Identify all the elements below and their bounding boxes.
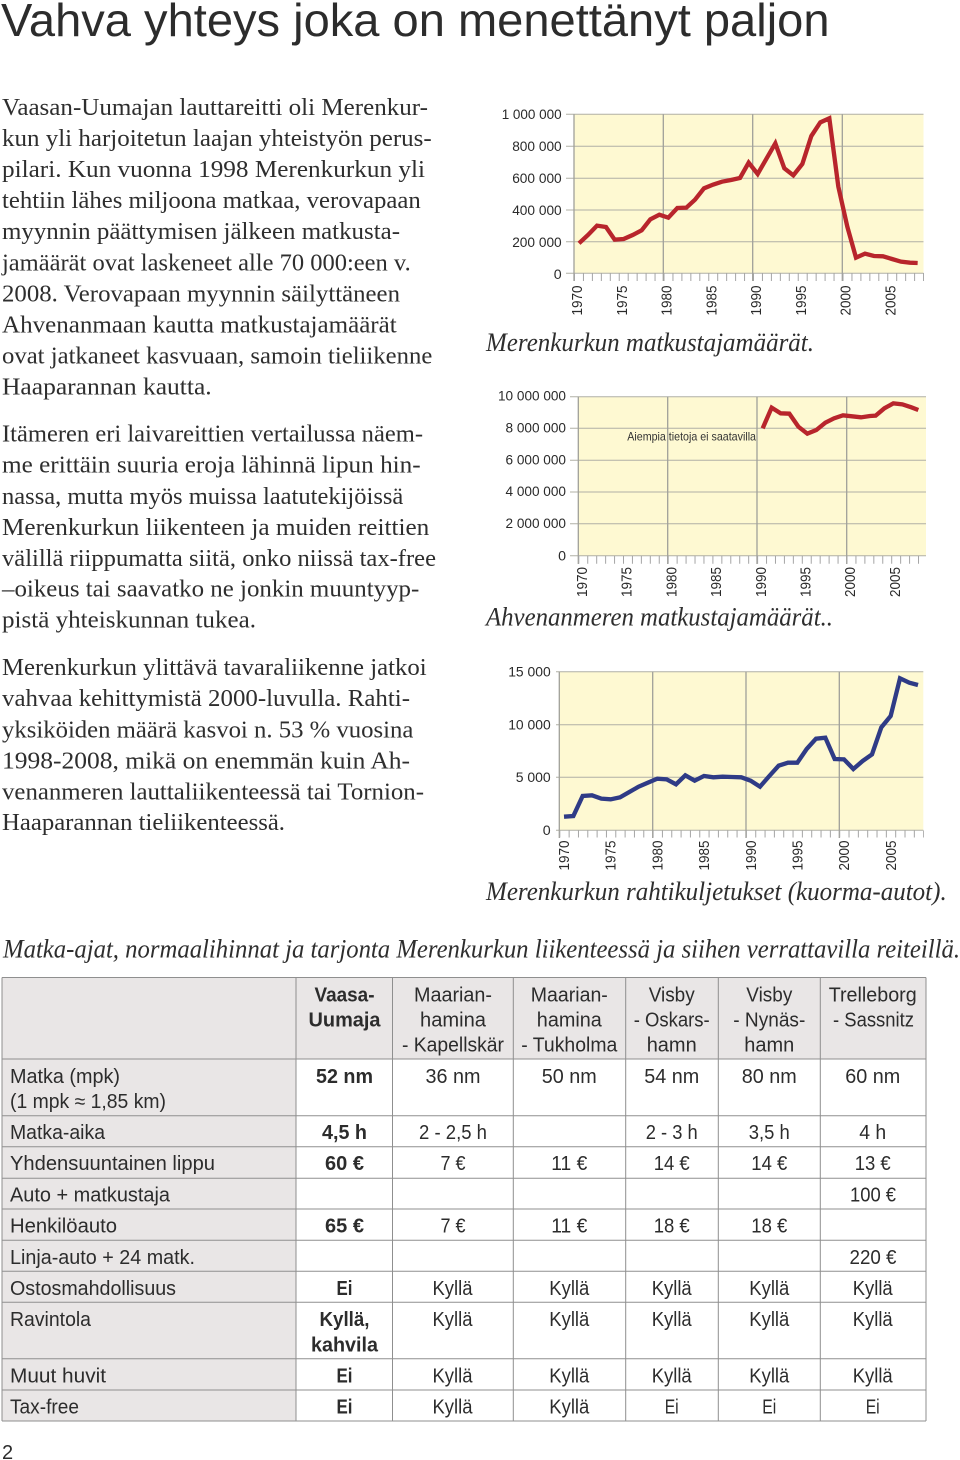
table header row: hamn — [647, 1034, 697, 1056]
row: Yhdensuuntainen lippu: 60 € — [325, 1153, 364, 1175]
row: Muut huvit: Kyllä — [652, 1365, 693, 1387]
text block: body paragraph 2: välillä riippumatta siitä, onko niissä tax-free — [2, 545, 436, 572]
data line: passengers — [579, 118, 918, 263]
row: Yhdensuuntainen lippu: 7 € — [440, 1153, 466, 1175]
row: Matka: 36 nm — [426, 1066, 480, 1088]
row: Yhdensuuntainen lippu — [10, 1153, 891, 1175]
table header row: hamina — [420, 1010, 487, 1032]
row: Matka: 80 nm — [742, 1066, 797, 1088]
row: Linja-auto: Linja-auto + 24 matk. — [10, 1247, 195, 1269]
y axis labels: 6 000 000 — [506, 452, 566, 468]
row: Auto + matkustaja — [10, 1184, 896, 1206]
text block: body paragraph 2: pistä yhteiskunnan tukea. — [2, 607, 256, 634]
row: Matka: (1 mpk ≈ 1,85 km) — [10, 1091, 166, 1113]
row: Yhdensuuntainen lippu: 14 € — [751, 1153, 787, 1175]
y axis labels: 1 000 000 — [502, 107, 562, 123]
y axis labels: 800 000 — [512, 139, 562, 155]
table header row: Visby — [649, 984, 695, 1006]
row: Matka-aika: 2 - 3 h — [646, 1122, 698, 1144]
row: Tax-free: Kyllä — [432, 1396, 473, 1418]
x axis labels: 1975 — [620, 567, 636, 597]
row: Matka: 54 nm — [644, 1066, 699, 1088]
x axis labels: 1980 — [660, 286, 676, 316]
table header row: - Nynäs- — [733, 1010, 805, 1032]
row: Yhdensuuntainen lippu: Yhdensuuntainen lippu — [10, 1153, 215, 1175]
row: Ostosmahdollisuus: Kyllä — [432, 1278, 473, 1300]
y axis labels: 400 000 — [512, 203, 562, 219]
text block: body paragraph 2: Merenkurkun liikenteen ja muiden reittien — [2, 514, 429, 541]
row: Ostosmahdollisuus: Kyllä — [652, 1278, 693, 1300]
row: Henkilöauto: 65 € — [325, 1215, 364, 1237]
row: Henkilöauto: 7 € — [440, 1215, 466, 1237]
text block: body paragraph 2: me erittäin suuria eroja lähinnä lipun hin- — [2, 452, 421, 479]
table header row: - Oskars- — [634, 1010, 710, 1032]
row: Henkilöauto: Henkilöauto — [10, 1215, 117, 1237]
x axis labels: 1980 — [650, 840, 666, 870]
text block: body paragraph 1 — [1, 94, 432, 400]
x axis labels — [557, 840, 900, 870]
text block: body paragraph 2: –oikeus tai saavatko ne jonkin muuntyyp- — [1, 576, 419, 603]
y axis labels: 0 — [558, 549, 566, 565]
row: Muut huvit: Kyllä — [432, 1365, 473, 1387]
y axis labels — [498, 389, 566, 565]
row: Muut huvit: Ei — [336, 1365, 352, 1387]
x axis labels: 2000 — [837, 840, 853, 870]
x axis labels: 2005 — [884, 840, 900, 870]
x axis labels: 1970 — [570, 286, 586, 316]
x axis labels: 1970 — [557, 840, 573, 870]
y axis labels: 2 000 000 — [506, 516, 566, 532]
text block: body paragraph 1: 2008. Verovapaan myynnin säilyttäneen — [2, 280, 400, 308]
comparison table — [2, 978, 926, 1421]
text block: body paragraph 3: Haaparannan tieliikenteessä. — [2, 809, 285, 836]
y axis labels: 0 — [543, 823, 551, 839]
table grid and shading — [2, 978, 926, 1421]
row: Matka: 52 nm — [316, 1066, 373, 1088]
row: Matka: Matka (mpk) — [10, 1066, 120, 1088]
x axis labels: 1975 — [615, 286, 631, 316]
x axis labels: 1985 — [697, 840, 713, 870]
table header row: Vaasa- — [314, 984, 374, 1006]
y axis labels: 0 — [554, 267, 562, 283]
table header row: Maarian- — [414, 984, 492, 1006]
text block: body paragraph 3: Merenkurkun ylittävä tavaraliikenne jatkoi — [2, 654, 427, 681]
row: Muut huvit: Kyllä — [853, 1365, 894, 1387]
text block: body paragraph 1: Vaasan-Uumajan lauttareitti oli Merenkur- — [2, 94, 428, 121]
row: Matka-aika — [10, 1122, 886, 1144]
x axis labels: 1990 — [744, 840, 760, 870]
row: Matka-aika: 3,5 h — [749, 1122, 790, 1144]
data line: freight — [564, 678, 918, 817]
text block: body paragraph 1: myynnin päättymisen jälkeen matkusta- — [2, 218, 400, 245]
x axis labels: 1990 — [754, 567, 770, 597]
y axis labels — [508, 665, 551, 839]
text block: body paragraph 1: ovat jatkaneet kasvuaan, samoin tieliikenne — [2, 342, 432, 369]
row: Ostosmahdollisuus: Kyllä — [749, 1278, 790, 1300]
row: Tax-free: Ei — [665, 1396, 679, 1418]
row: Ostosmahdollisuus: Kyllä — [549, 1278, 590, 1300]
text block: body paragraph 3: yksiköiden määrä kasvoi n. 53 % vuosina — [2, 716, 413, 743]
row: Yhdensuuntainen lippu: 14 € — [654, 1153, 690, 1175]
x axis labels: 1980 — [664, 567, 680, 597]
y axis labels — [502, 107, 562, 283]
row: Ravintola: Kyllä — [652, 1309, 693, 1331]
row: Tax-free: Ei — [866, 1396, 880, 1418]
row: Tax-free: Ei — [336, 1396, 352, 1418]
row: Henkilöauto: 11 € — [551, 1215, 587, 1237]
x axis labels: 2005 — [883, 286, 899, 316]
x axis labels: 1995 — [798, 567, 814, 597]
caption: chart 3: Merenkurkun rahtikuljetukset (kuorma-autot). — [485, 877, 947, 906]
row: Matka: 60 nm — [845, 1066, 900, 1088]
caption: chart 1: Merenkurkun matkustajamäärät. — [485, 328, 814, 357]
x axis labels: 2005 — [888, 567, 904, 597]
row: Auto + matkustaja: Auto + matkustaja — [10, 1184, 171, 1206]
x axis labels: 1990 — [749, 286, 765, 316]
text block: body paragraph 1: Haaparannan kautta. — [2, 373, 212, 400]
row: Ostosmahdollisuus — [10, 1278, 894, 1300]
table header row: - Tukholma — [521, 1034, 618, 1056]
text block: body paragraph 2: nassa, mutta myös muissa laatutekijöissä — [2, 483, 403, 510]
x axis labels: 1970 — [575, 567, 591, 597]
line chart: Merenkurkun rahtikuljetukset — [508, 665, 924, 870]
x axis labels — [575, 567, 904, 597]
x axis labels: 2000 — [843, 567, 859, 597]
text block: body paragraph 2 — [1, 421, 436, 634]
row: Linja-auto: 220 € — [850, 1247, 896, 1269]
row: Yhdensuuntainen lippu: 13 € — [855, 1153, 891, 1175]
row: Henkilöauto: 18 € — [654, 1215, 690, 1237]
row: Matka-aika: 4,5 h — [322, 1122, 367, 1144]
text block: body paragraph 1: tehtiin lähes miljoona matkaa, verovapaan — [2, 187, 421, 214]
text block: body paragraph 2: Itämeren eri laivareittien vertailussa näem- — [2, 421, 423, 448]
y axis labels: 4 000 000 — [506, 484, 566, 500]
row: Ostosmahdollisuus: Ostosmahdollisuus — [10, 1278, 176, 1300]
row: Matka-aika: 4 h — [859, 1122, 886, 1144]
table header row: Visby — [746, 984, 792, 1006]
row: Ravintola: Kyllä — [749, 1309, 790, 1331]
row: Matka: 50 nm — [542, 1066, 597, 1088]
row: Henkilöauto: 18 € — [751, 1215, 787, 1237]
row: Tax-free: Tax-free — [10, 1396, 79, 1418]
row: Ostosmahdollisuus: Ei — [336, 1278, 352, 1300]
table header row: Maarian- — [531, 984, 608, 1006]
row: Yhdensuuntainen lippu: 11 € — [551, 1153, 587, 1175]
table header row: hamn — [744, 1034, 794, 1056]
caption: chart 2: Ahvenanmeren matkustajamäärät.. — [484, 603, 833, 632]
table header row — [308, 984, 917, 1056]
y axis labels: 8 000 000 — [506, 420, 566, 436]
table header row: hamina — [537, 1010, 603, 1032]
table header row: Trelleborg — [829, 984, 917, 1006]
row: Matka — [10, 1066, 900, 1113]
row: Linja-auto — [10, 1247, 896, 1269]
text block: body paragraph 3 — [2, 654, 427, 836]
text block: body paragraph 3: venanmeren lauttaliikenteessä tai Tornion- — [2, 778, 424, 805]
row: Ravintola: Kyllä — [549, 1309, 590, 1331]
row: Muut huvit: Muut huvit — [10, 1365, 106, 1387]
note: data not available: Aiempia tietoja ei saatavilla — [627, 430, 756, 444]
line chart: Merenkurkun matkustajamäärät — [502, 107, 924, 316]
row: Matka-aika: 2 - 2,5 h — [419, 1122, 487, 1144]
x axis labels: 1985 — [709, 567, 725, 597]
row: Muut huvit: Kyllä — [549, 1365, 590, 1387]
table header row: Uumaja — [308, 1010, 381, 1032]
row: Muut huvit: Kyllä — [749, 1365, 790, 1387]
text block: body paragraph 1: kun yli harjoitetun laajan yhteistyön perus- — [2, 125, 432, 152]
x axis labels: 1975 — [604, 840, 620, 870]
y axis labels: 600 000 — [512, 171, 562, 187]
row: Ravintola: Kyllä, — [320, 1309, 370, 1331]
line chart: Ahvenanmeren matkustajamäärät — [498, 389, 926, 597]
row: Matka-aika: Matka-aika — [10, 1122, 106, 1144]
y axis labels: 10 000 — [508, 718, 551, 734]
row: Ravintola: Ravintola — [10, 1309, 92, 1331]
x axis labels: 1995 — [790, 840, 806, 870]
text block: body paragraph 1: pilari. Kun vuonna 1998 Merenkurkun yli — [2, 156, 425, 183]
row: Henkilöauto — [10, 1215, 787, 1237]
text block: body paragraph 1: Ahvenanmaan kautta matkustajamäärät — [2, 311, 397, 338]
row: Ravintola — [10, 1309, 894, 1356]
data line: Åland passengers — [763, 403, 918, 434]
y axis labels: 5 000 — [516, 770, 551, 786]
text block: body paragraph 1: jamäärät ovat laskeneet alle 70 000:een v. — [1, 250, 411, 276]
row: Ravintola: Kyllä — [853, 1309, 894, 1331]
row: Ravintola: Kyllä — [432, 1309, 473, 1331]
row: Ravintola: kahvila — [311, 1334, 379, 1356]
y axis labels: 10 000 000 — [498, 389, 566, 405]
text block: body paragraph 3: 1998-2008, mikä on enemmän kuin Ah- — [2, 747, 410, 774]
y axis labels: 200 000 — [512, 235, 562, 251]
row: Tax-free: Kyllä — [549, 1396, 590, 1418]
y axis labels: 15 000 — [508, 665, 551, 681]
x axis labels: 2000 — [839, 286, 855, 316]
x axis labels: 1995 — [794, 286, 810, 316]
row: Ostosmahdollisuus: Kyllä — [853, 1278, 894, 1300]
row: Tax-free — [10, 1396, 880, 1418]
table header row: - Kapellskär — [402, 1034, 504, 1056]
table header row: - Sassnitz — [833, 1010, 914, 1032]
row: Auto + matkustaja: 100 € — [850, 1184, 896, 1206]
x axis labels — [570, 286, 899, 316]
row: Muut huvit — [10, 1365, 894, 1387]
row: Tax-free: Ei — [762, 1396, 776, 1418]
text block: body paragraph 3: vahvaa kehittymistä 2000-luvulla. Rahti- — [2, 685, 410, 712]
x axis labels: 1985 — [704, 286, 720, 316]
